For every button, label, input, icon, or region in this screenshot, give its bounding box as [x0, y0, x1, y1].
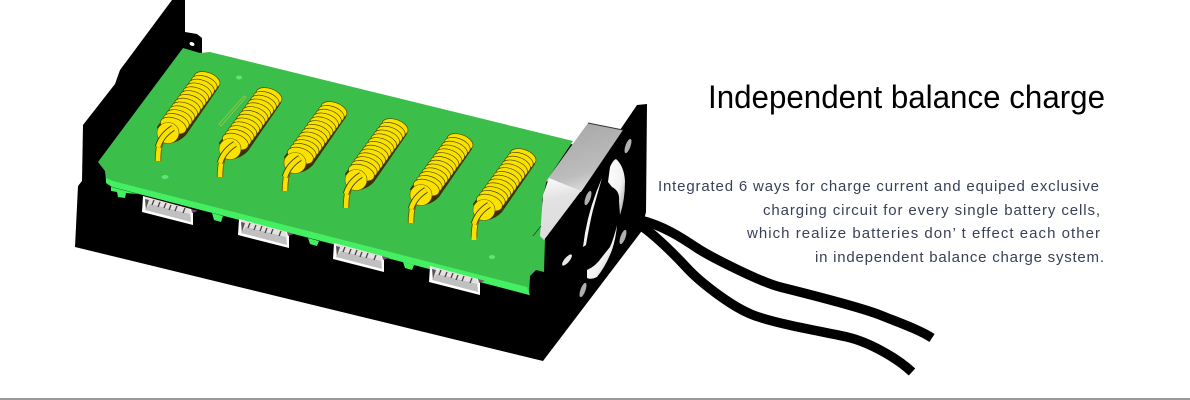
- description text: charging circuit for every single battery cells,: [763, 202, 1100, 219]
- spring 6 long lead: [472, 236, 476, 240]
- description text: which realize batteries don’ t effect each other: [746, 225, 1100, 242]
- spring contact 5: [410, 130, 475, 223]
- description text: [658, 178, 1104, 266]
- balance connector 2: [238, 219, 294, 248]
- spring contact 4: [345, 115, 410, 208]
- board tabs: [111, 187, 414, 270]
- mounting hole: [189, 41, 195, 47]
- spring contact 1: [157, 68, 222, 161]
- spring contact 2: [219, 84, 284, 177]
- black enclosure body: [75, 0, 647, 361]
- spring contact 3: [284, 98, 349, 191]
- description text: Integrated 6 ways for charge current and equiped exclusive: [658, 178, 1099, 195]
- balance connector 3: [333, 243, 389, 272]
- fan mounting holes: [561, 138, 633, 298]
- bottom divider: [0, 398, 1190, 400]
- title: Independent balance charge: [708, 79, 1105, 115]
- balance connector 1: [142, 196, 198, 225]
- description text: in independent balance charge system.: [815, 249, 1104, 266]
- cooling fan housing: [533, 123, 623, 240]
- light green board edge: [106, 178, 530, 295]
- power cables: [640, 220, 932, 372]
- board vias: [162, 76, 495, 259]
- balance connector 4: [429, 266, 485, 295]
- silkscreen outline: [219, 96, 246, 126]
- green circuit board: [98, 48, 573, 295]
- fan blades: [583, 159, 625, 279]
- spring contact 6: [473, 145, 538, 238]
